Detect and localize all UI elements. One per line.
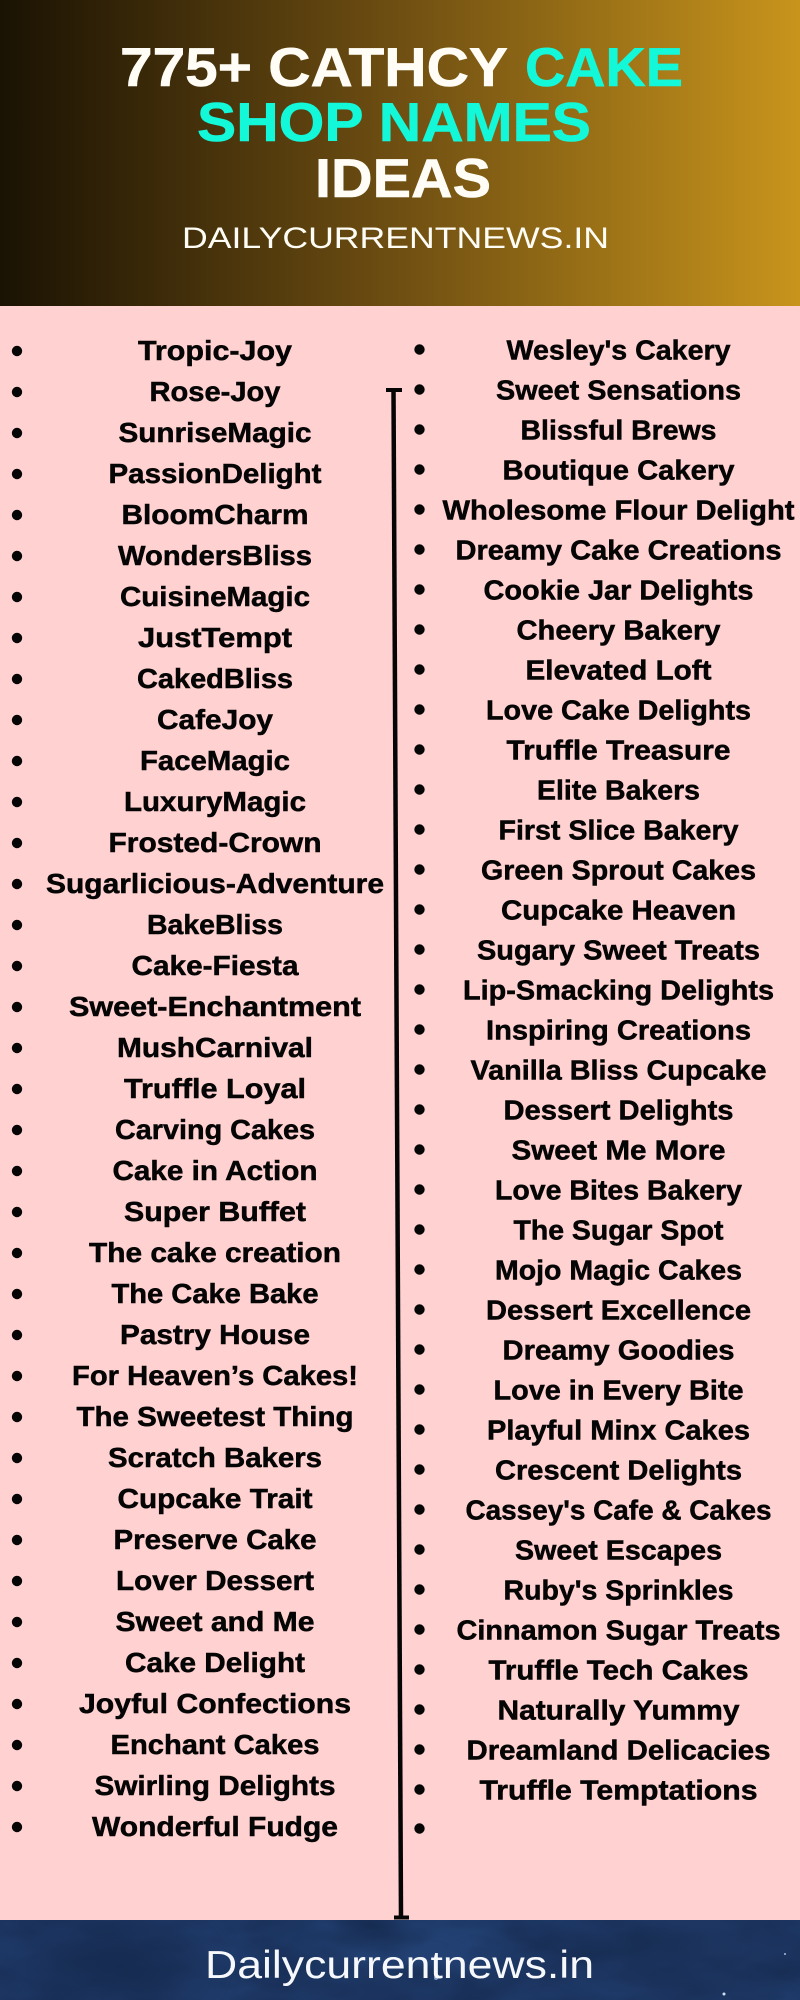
left column name text: Tropic-Joy xyxy=(138,335,292,366)
left column name text: MushCarnival xyxy=(117,1032,313,1063)
right column name text: Vanilla Bliss Cupcake xyxy=(470,1055,766,1086)
left column name text: Sugarlicious-Adventure xyxy=(46,868,384,899)
right column name text: Truffle Treasure xyxy=(506,735,730,766)
left column name text: JustTempt xyxy=(138,622,292,653)
right column name text: Crescent Delights xyxy=(495,1455,742,1486)
left column name text: Cake Delight xyxy=(125,1647,305,1678)
right column name text: Dreamy Goodies xyxy=(502,1335,734,1366)
right column name text xyxy=(442,335,794,1806)
right column name text: Sweet Escapes xyxy=(515,1535,722,1566)
left column name text: Joyful Confections xyxy=(79,1688,351,1719)
right column name text: Wholesome Flour Delight xyxy=(442,495,794,526)
right column name text: Dessert Excellence xyxy=(486,1295,751,1326)
left column name text: Sweet and Me xyxy=(116,1606,314,1637)
right column name text: Cassey's Cafe & Cakes xyxy=(466,1495,772,1526)
right column name text: Wesley's Cakery xyxy=(506,335,731,366)
left column name text: Carving Cakes xyxy=(115,1114,315,1145)
title: SHOP NAMES xyxy=(197,91,591,153)
title xyxy=(120,36,683,209)
subtitle: website: DAILYCURRENTNEWS.IN xyxy=(182,222,609,255)
right column name text: Truffle Temptations xyxy=(480,1775,758,1806)
left column name text: CakedBliss xyxy=(137,663,293,694)
title: IDEAS xyxy=(315,147,491,209)
left column name text: The Sweetest Thing xyxy=(76,1401,354,1432)
left column name text: Lover Dessert xyxy=(116,1565,314,1596)
left column name text: Frosted-Crown xyxy=(108,827,322,858)
left column name text: Sweet-Enchantment xyxy=(69,991,361,1022)
left column name text: For Heaven’s Cakes! xyxy=(72,1360,358,1391)
left column name text: Wonderful Fudge xyxy=(92,1811,338,1842)
right column name text: Cupcake Heaven xyxy=(501,895,736,926)
right column name text: Dessert Delights xyxy=(504,1095,734,1126)
title: 775+ CATHCY xyxy=(120,36,508,98)
right column name text: Dreamy Cake Creations xyxy=(456,535,782,566)
left column name text: The Cake Bake xyxy=(112,1278,318,1309)
left column name text: Cake-Fiesta xyxy=(132,950,299,981)
right column name text: Love in Every Bite xyxy=(494,1375,744,1406)
left column name text: Enchant Cakes xyxy=(110,1729,320,1760)
left column name text: Cupcake Trait xyxy=(118,1483,312,1514)
right column name text: Cookie Jar Delights xyxy=(484,575,754,606)
right column name text: Sweet Me More xyxy=(512,1135,726,1166)
right column name text: Love Cake Delights xyxy=(486,695,751,726)
left column bullets xyxy=(12,346,22,1832)
right column name text: Playful Minx Cakes xyxy=(487,1415,750,1446)
panel: header banner xyxy=(0,0,800,306)
right column name text: Sweet Sensations xyxy=(496,375,741,406)
right column of names xyxy=(414,335,794,1834)
left column name text: CafeJoy xyxy=(157,704,273,735)
left column name text: The cake creation xyxy=(89,1237,341,1268)
left column name text: CuisineMagic xyxy=(120,581,310,612)
right column name text: Elevated Loft xyxy=(526,655,712,686)
right column name text: Blissful Brews xyxy=(520,415,716,446)
right column name text: The Sugar Spot xyxy=(514,1215,724,1246)
right column name text: Lip-Smacking Delights xyxy=(463,975,774,1006)
right column name text: Sugary Sweet Treats xyxy=(477,935,760,966)
left column of names xyxy=(12,335,384,1842)
left column name text: Preserve Cake xyxy=(114,1524,316,1555)
column divider line xyxy=(386,389,409,1918)
left column name text: BakeBliss xyxy=(147,909,283,940)
left column name text: WondersBliss xyxy=(118,540,312,571)
right column name text: Naturally Yummy xyxy=(498,1695,740,1726)
left column name text: Super Buffet xyxy=(124,1196,306,1227)
title: CAKE xyxy=(525,36,683,98)
panel: footer band xyxy=(0,1920,800,2000)
right column name text: Ruby's Sprinkles xyxy=(504,1575,734,1606)
left column name text: FaceMagic xyxy=(140,745,290,776)
left column name text: Rose-Joy xyxy=(150,376,281,407)
left column name text: LuxuryMagic xyxy=(124,786,306,817)
right column name text: Green Sprout Cakes xyxy=(481,855,756,886)
left column name text: Pastry House xyxy=(120,1319,310,1350)
left column name text: BloomCharm xyxy=(122,499,308,530)
left column name text: Cake in Action xyxy=(112,1155,318,1186)
right column name text: Truffle Tech Cakes xyxy=(488,1655,748,1686)
left column name text xyxy=(46,335,384,1842)
right column name text: First Slice Bakery xyxy=(498,815,739,846)
right column name text: Boutique Cakery xyxy=(502,455,735,486)
right column name text: Elite Bakers xyxy=(537,775,700,806)
right column name text: Cheery Bakery xyxy=(516,615,721,646)
footer website text: Dailycurrentnews.in xyxy=(205,1944,594,1987)
left column name text: Scratch Bakers xyxy=(108,1442,322,1473)
left column name text: PassionDelight xyxy=(108,458,322,489)
right column bullets xyxy=(414,344,425,1834)
left column name text: Swirling Delights xyxy=(94,1770,336,1801)
right column name text: Mojo Magic Cakes xyxy=(495,1255,742,1286)
left column name text: SunriseMagic xyxy=(118,417,312,448)
right column name text: Dreamland Delicacies xyxy=(466,1735,770,1766)
left column name text: Truffle Loyal xyxy=(124,1073,306,1104)
right column name text: Inspiring Creations xyxy=(486,1015,751,1046)
right column name text: Cinnamon Sugar Treats xyxy=(456,1615,780,1646)
right column name text: Love Bites Bakery xyxy=(495,1175,742,1206)
